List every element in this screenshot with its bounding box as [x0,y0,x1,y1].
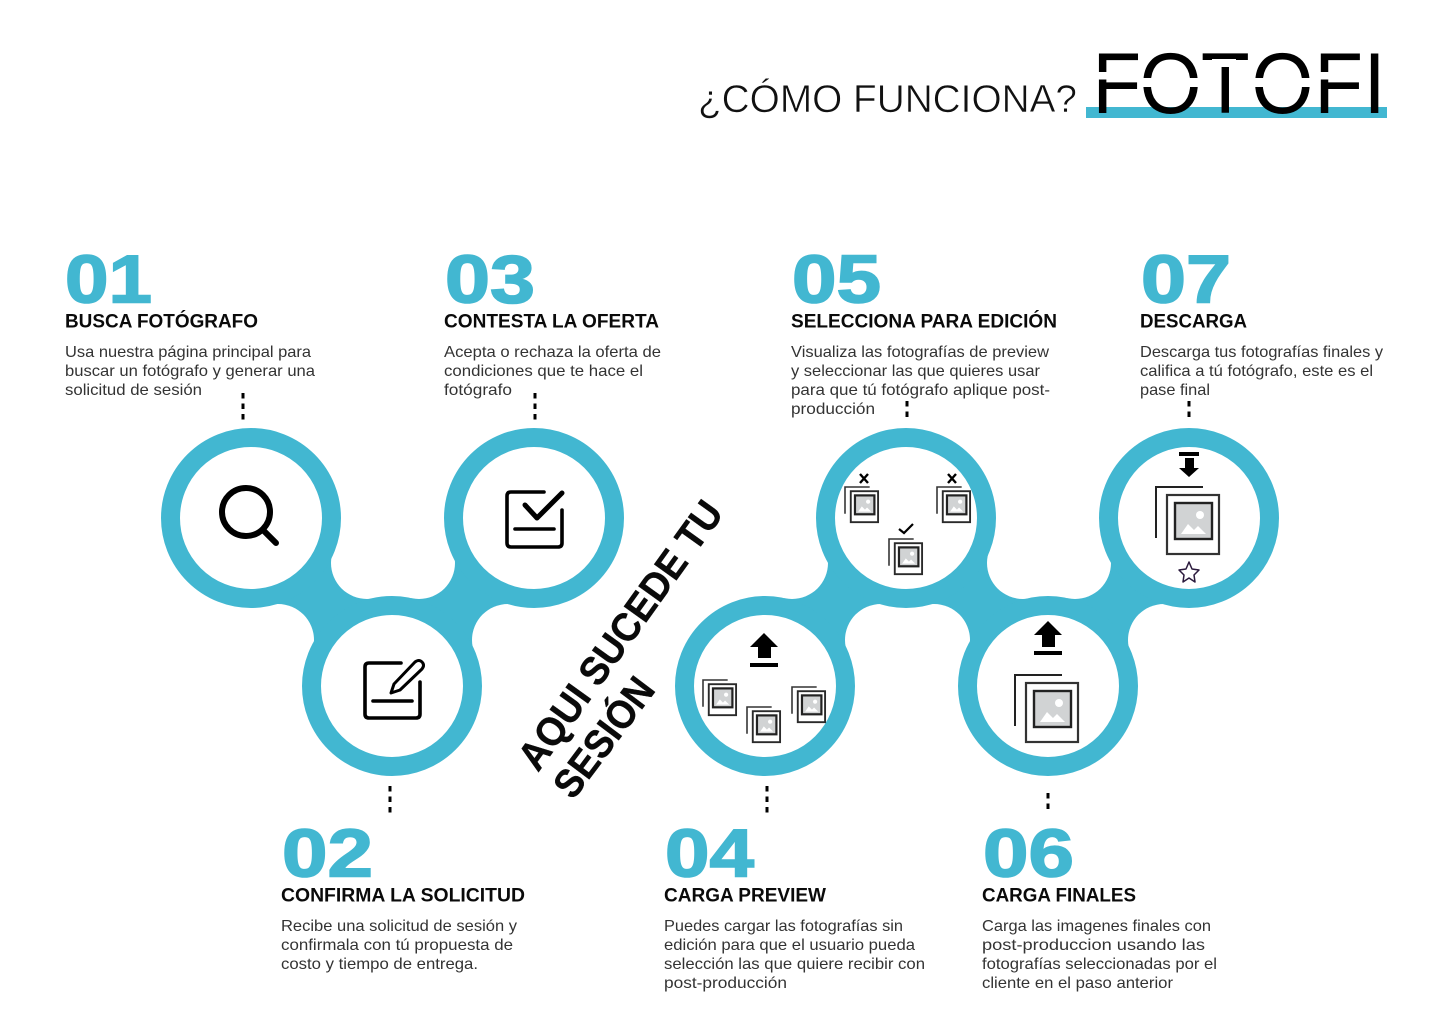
description: solicitud de sesión [65,382,202,399]
description [982,918,1217,992]
download arrow [1179,452,1199,477]
description: fotógrafo [444,382,512,399]
reject mark right [948,474,956,483]
icon: form with pen [365,660,424,718]
number: 01 [65,242,152,318]
description: condiciones que te hace el [444,363,643,380]
ring outlines [170,438,1270,766]
description: selección las que quiere recibir con [664,956,925,973]
photo stack right [937,487,970,522]
step 04 [664,816,925,992]
number: 05 [792,242,881,318]
description: Descarga tus fotografías finales y [1140,344,1383,361]
description [791,344,1050,418]
icon: select photos [845,474,970,574]
description: buscar un fotógrafo y generar una [65,363,315,380]
description [444,344,661,399]
description: producción [791,401,875,418]
photo stack [1156,487,1219,554]
chain of seven connected rings [170,438,1270,766]
description: costo y tiempo de entrega. [281,956,478,973]
heading: BUSCA FOTÓGRAFO [65,308,258,332]
connector notches [242,527,1200,676]
description: fotografías seleccionadas por el [982,956,1217,973]
photo stack right [792,687,825,722]
logo: FOTOFI wordmark: FOTOFI [1092,35,1386,132]
description: Recibe una solicitud de sesión y [281,918,517,935]
heading: DESCARGA [1140,310,1247,332]
number: 04 [665,816,754,892]
header: title and logo [698,35,1387,132]
description [281,918,517,973]
description [664,918,925,992]
star rating [1179,562,1199,582]
accept mark [899,524,913,533]
number: 06 [983,816,1074,892]
description: Acepta o rechaza la oferta de [444,344,661,361]
step 07 [1140,242,1383,399]
description: cliente en el paso anterior [982,975,1174,992]
icon: form with checkmark [507,492,562,547]
logo: underline bar [1086,107,1387,118]
photo stack left [845,487,878,522]
upload arrow [1034,621,1062,655]
description: Carga las imagenes finales con [982,918,1211,935]
icon: download and rate [1156,452,1219,582]
description: para que tú fotógrafo aplique post- [791,382,1050,399]
step 06 [982,816,1217,992]
description: Usa nuestra página principal para [65,344,311,361]
description: Visualiza las fotografías de preview [791,344,1049,361]
icon: upload finals [1015,621,1078,742]
description: Puedes cargar las fotografías sin [664,918,903,935]
description: confirmala con tú propuesta de [281,937,513,954]
reject mark left [860,474,868,483]
heading: CARGA FINALES [982,884,1136,906]
number: 03 [445,242,535,318]
description: califica a tú fotógrafo, este es el [1140,363,1373,380]
icon: search magnifier [222,488,276,543]
dotted connectors [243,393,1189,813]
description: edición para que el usuario pueda [664,937,915,954]
step 02 [281,816,525,973]
ring connectors [251,518,1189,686]
number: 02 [282,816,373,892]
logo: white slits [1095,59,1362,87]
photo stack [1015,675,1078,742]
caption line 1: AQUI SUCEDE TU [510,493,732,778]
description: post-produccion usando las [982,937,1205,954]
heading: CONTESTA LA OFERTA [444,310,659,332]
photo stack center [889,539,922,574]
description [65,344,315,399]
photo stack left [703,680,736,715]
number: 07 [1141,242,1231,318]
heading: SELECCIONA PARA EDICIÓN [791,308,1057,332]
heading: CONFIRMA LA SOLICITUD [281,884,525,906]
description [1140,344,1383,399]
title: como funciona: ¿CÓMO FUNCIONA? [698,78,1077,121]
description: pase final [1140,382,1210,399]
heading: CARGA PREVIEW [664,884,827,906]
description: post-producción [664,975,787,992]
upload arrow [750,633,778,667]
step 05 [791,242,1057,418]
rotated caption: aqui sucede tu sesion [510,493,732,806]
description: y seleccionar las que quieres usar [791,363,1041,380]
icon: upload previews [703,633,825,742]
photo stack middle [747,707,780,742]
step 01 [65,242,315,399]
caption line 2: SESIÓN [543,668,664,806]
step 03 [444,242,661,399]
